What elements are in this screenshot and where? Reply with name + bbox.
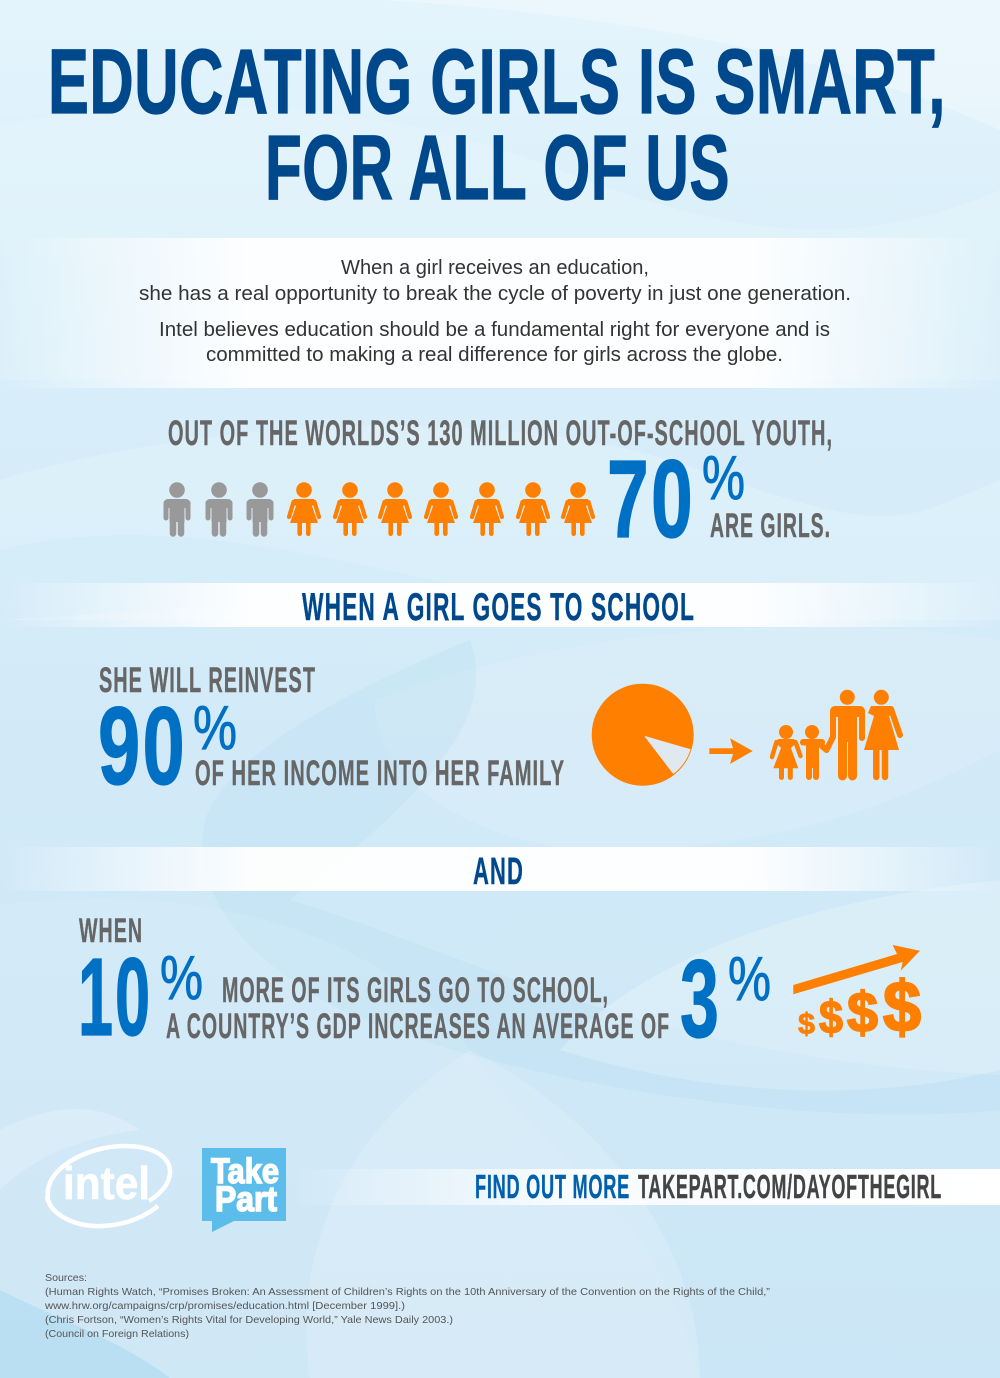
logo: Intel: intel bbox=[63, 1157, 150, 1209]
big number 10 percent: % bbox=[160, 944, 203, 1013]
sources bbox=[44, 1272, 771, 1340]
big number 10 percent: 10 bbox=[78, 936, 152, 1059]
pictogram: 3 boys, 7 girls bbox=[164, 482, 593, 534]
big number 3 percent: % bbox=[728, 945, 771, 1014]
big number 90 percent: % bbox=[193, 694, 237, 763]
sources: (Council on Foreign Relations) bbox=[45, 1328, 189, 1340]
panel: out-of-school youth statistic bbox=[164, 414, 833, 561]
sources: (Human Rights Watch, “Promises Broken: An Assessment of Children’s Rights on the 10th Anniversary of the Convention on the Rights of the Child,” bbox=[45, 1286, 771, 1298]
icon: family bbox=[772, 690, 900, 778]
call to action: FIND OUT MORE bbox=[475, 1168, 630, 1205]
icon: growing dollar signs: $ bbox=[847, 981, 878, 1045]
GDP sentence: MORE OF ITS GIRLS GO TO SCHOOL, bbox=[222, 971, 609, 1010]
sources: www.hrw.org/campaigns/crp/promises/education.html [December 1999].) bbox=[44, 1300, 405, 1312]
heading: when a girl goes to school: WHEN A GIRL GOES TO SCHOOL bbox=[302, 586, 695, 629]
big number 90 percent: 90 bbox=[98, 685, 187, 808]
are girls label: ARE GIRLS. bbox=[710, 507, 831, 545]
pie chart 90 percent bbox=[592, 684, 694, 786]
icon: growing dollar signs bbox=[798, 968, 921, 1047]
logo: TakePart speech bubble bbox=[202, 1148, 286, 1232]
when label: WHEN bbox=[79, 912, 143, 950]
intro text block: she has a real opportunity to break the cycle of poverty in just one generation. bbox=[139, 283, 851, 305]
intro text block: When a girl receives an education, bbox=[341, 257, 649, 279]
logo: Intel bbox=[47, 1146, 170, 1226]
icon: growing dollar signs: $ bbox=[798, 1008, 815, 1041]
sources: (Chris Fortson, “Women’s Rights Vital for Developing World,” Yale News Daily 2003.) bbox=[45, 1314, 453, 1326]
big number 70 percent: % bbox=[702, 444, 745, 513]
sources: Sources: bbox=[45, 1272, 87, 1284]
intro text block: committed to making a real difference for girls across the globe. bbox=[206, 344, 783, 366]
icon: growing dollar signs: $ bbox=[883, 968, 921, 1047]
icon: growing dollar signs: $ bbox=[819, 991, 843, 1043]
heading: and: AND bbox=[473, 851, 524, 893]
panel: GDP statistic bbox=[78, 912, 921, 1061]
reinvest lead text: SHE WILL REINVEST bbox=[99, 661, 316, 700]
panel: reinvest income bbox=[98, 661, 900, 808]
intro text block bbox=[139, 257, 851, 366]
icon: rising arrow bbox=[793, 945, 920, 994]
big number 3 percent: 3 bbox=[680, 938, 721, 1061]
arrow to family bbox=[709, 738, 753, 764]
intro text block: Intel believes education should be a fundamental right for everyone and is bbox=[159, 319, 830, 341]
call to action bbox=[475, 1168, 942, 1205]
logo: TakePart speech bubble: Take bbox=[211, 1152, 279, 1191]
GDP sentence bbox=[166, 971, 670, 1046]
reinvest tail text: OF HER INCOME INTO HER FAMILY bbox=[195, 754, 565, 793]
title bbox=[48, 31, 946, 219]
logo: TakePart speech bubble: Part bbox=[215, 1180, 277, 1219]
big number 70 percent: 70 bbox=[607, 438, 695, 561]
title: FOR ALL OF US bbox=[265, 117, 730, 219]
